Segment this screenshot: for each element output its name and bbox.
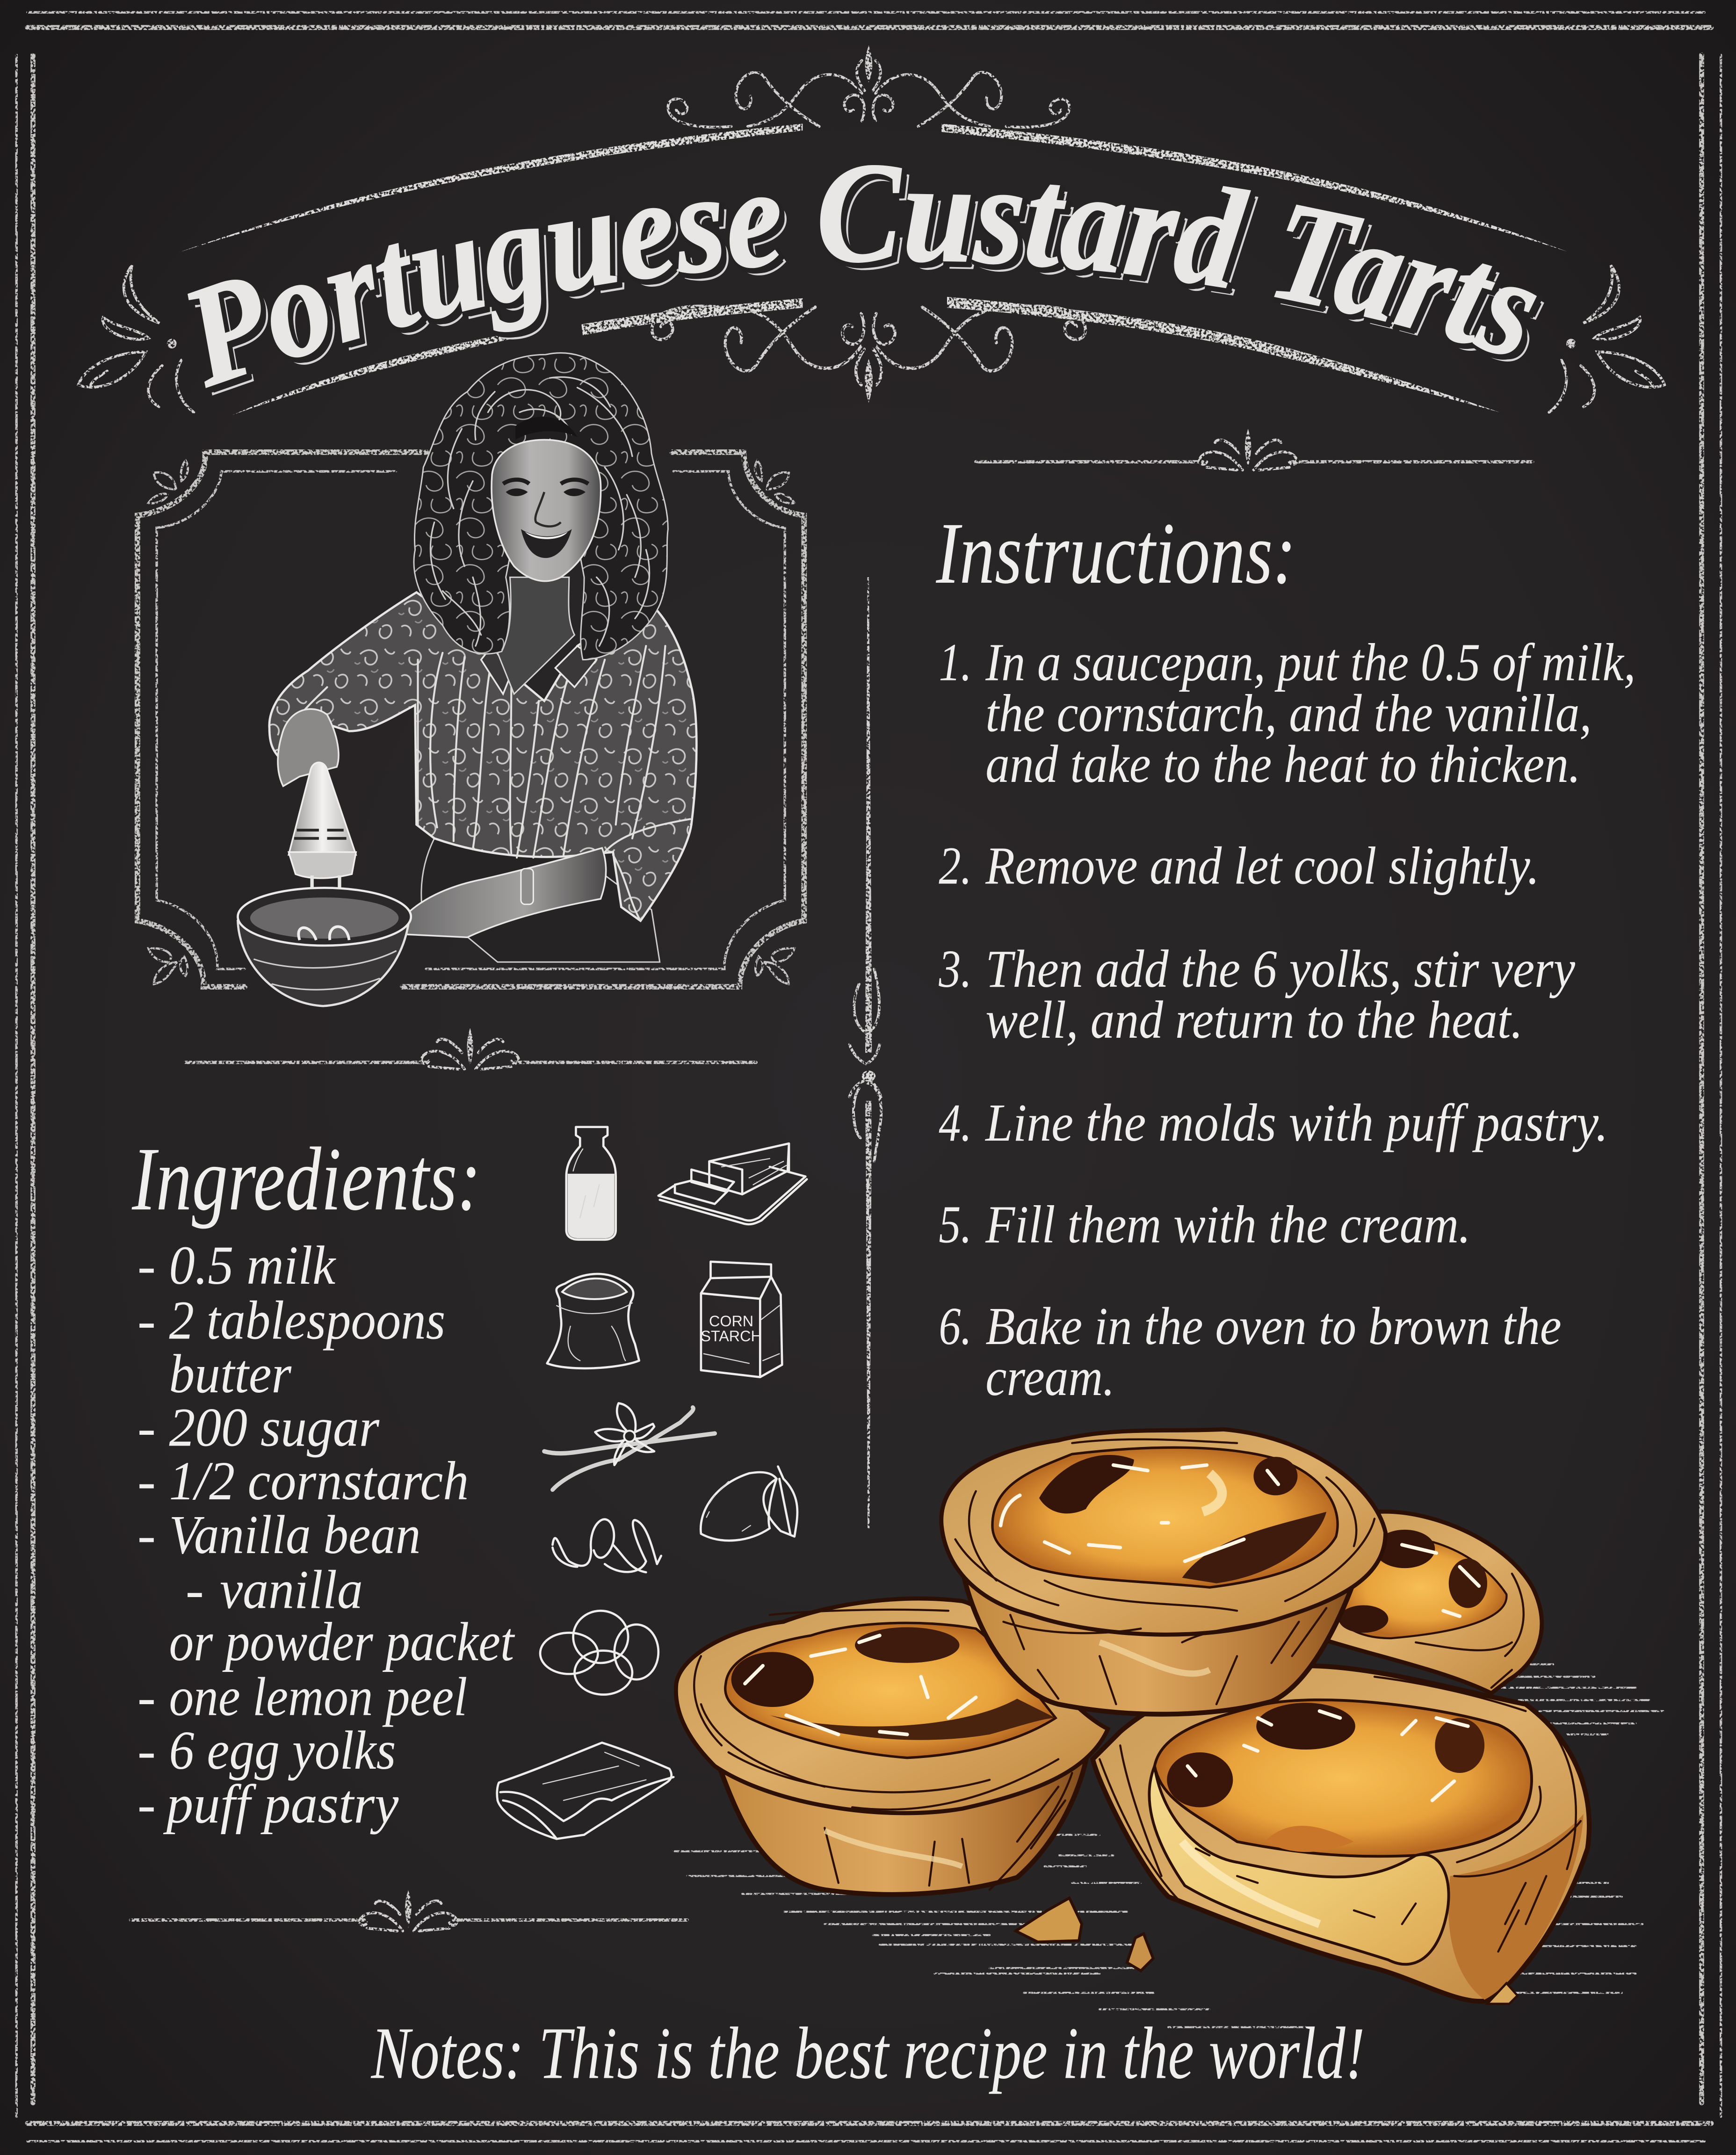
ingredients list: 1/2 cornstarch — [169, 1451, 469, 1511]
icon: lemon peel curl — [552, 1519, 661, 1572]
step 3: Then add the 6 yolks, stir very — [985, 939, 1575, 998]
icon: lemon with leaf — [701, 1467, 797, 1540]
title: Portuguese Custard Tarts: Portuguese Custard Tarts — [163, 133, 1558, 418]
eyes and brows — [503, 480, 588, 484]
step 1: In a saucepan, put the 0.5 of milk, — [985, 633, 1635, 692]
ingredients list: - — [137, 1451, 156, 1511]
ingredients list: - — [137, 1397, 156, 1458]
ingredients list: - — [137, 1667, 156, 1728]
ingredients list: 6 egg yolks — [169, 1720, 396, 1781]
mixing bowl — [238, 888, 411, 1006]
icon: corn starch box — [701, 1262, 782, 1377]
step 6: cream. — [985, 1347, 1115, 1407]
ingredients list: 200 sugar — [169, 1397, 380, 1458]
title: Portuguese Custard Tarts: Portuguese Custard Tarts — [170, 140, 1565, 424]
ingredients list: - — [137, 1290, 156, 1351]
step 2: 2. — [939, 836, 972, 896]
tart: top — [941, 1429, 1386, 1714]
step 2: Remove and let cool slightly. — [985, 836, 1540, 896]
icon: sugar sack — [547, 1274, 639, 1368]
ingredients list: vanilla — [220, 1559, 363, 1620]
ingredients list: Vanilla bean — [169, 1504, 420, 1565]
top flourish — [668, 45, 1070, 127]
hair — [414, 353, 668, 660]
tart: front with bite — [1093, 1666, 1589, 2001]
custard tarts illustration — [676, 1429, 1589, 2004]
ingredients list: puff pastry — [163, 1774, 399, 1835]
ingredients list: - — [137, 1235, 156, 1296]
tart table chalk hatching — [673, 1664, 1663, 2027]
divider bottom left — [130, 1890, 687, 1931]
bottom flourish — [652, 306, 1085, 403]
step 1: and take to the heat to thicken. — [985, 734, 1581, 794]
ingredients list: or powder packet — [169, 1612, 515, 1672]
skirt — [421, 839, 660, 962]
blouse — [269, 593, 696, 921]
icon: corn starch box: CORN — [709, 1313, 753, 1330]
ingredients list: - — [137, 1774, 156, 1835]
step 5: Fill them with the cream. — [985, 1195, 1471, 1254]
step 3: 3. — [939, 939, 972, 998]
tart: left — [676, 1598, 1108, 1895]
left arm hand — [278, 709, 339, 786]
icon: milk bottle — [566, 1127, 616, 1240]
ingredients heading: Ingredients: — [131, 1128, 481, 1229]
frame corner leaves — [148, 460, 795, 984]
portrait frame — [137, 452, 804, 987]
ingredients list: 2 tablespoons — [169, 1290, 445, 1351]
vertical centre divider — [849, 577, 881, 1528]
step 6 — [939, 1296, 1562, 1407]
icon: puff pastry sheets — [497, 1743, 673, 1839]
ingredients list: butter — [169, 1344, 292, 1404]
right side flourish — [1549, 265, 1664, 412]
step 1: 1. — [939, 633, 972, 692]
step 6: Bake in the oven to brown the — [985, 1296, 1562, 1356]
ingredients list — [137, 1235, 515, 1835]
face — [492, 440, 601, 581]
divider top right — [976, 429, 1533, 470]
step 4: Line the molds with puff pastry. — [984, 1093, 1608, 1152]
ingredients list: - — [137, 1720, 156, 1781]
instructions list — [939, 633, 1635, 1407]
title arcs and ornaments — [79, 45, 1664, 415]
icon: eggs — [540, 1611, 658, 1695]
step 6: 6. — [939, 1296, 972, 1356]
crumb — [1016, 1898, 1082, 1942]
step 4: 4. — [939, 1093, 972, 1152]
tart: back right — [1319, 1511, 1542, 1693]
ingredients list: 0.5 milk — [169, 1235, 336, 1296]
step 1 — [939, 633, 1635, 794]
step 5: 5. — [939, 1195, 972, 1254]
notes line: Notes: This is the best recipe in the world! — [370, 2012, 1365, 2094]
nose — [535, 492, 561, 527]
ingredients list: - — [137, 1504, 156, 1565]
icon: butter on dish — [658, 1143, 807, 1224]
left side flourish — [79, 265, 194, 412]
upper title arc — [177, 123, 1567, 253]
neck — [498, 577, 575, 694]
step 1: the cornstarch, and the vanilla, — [985, 683, 1591, 743]
step 3: well, and return to the heat. — [985, 990, 1523, 1049]
ingredients list: - — [186, 1559, 204, 1620]
crumb — [1127, 1934, 1153, 1971]
mixer — [289, 762, 356, 924]
ingredients list: one lemon peel — [169, 1667, 467, 1728]
instructions heading: Instructions: — [936, 504, 1296, 602]
smile — [521, 529, 572, 558]
portrait: woman with mixer — [238, 353, 696, 1006]
step 3 — [939, 939, 1575, 1049]
icon: corn starch box: STARCH — [701, 1328, 762, 1345]
lower title arc — [232, 297, 1499, 415]
divider under portrait — [186, 1028, 756, 1069]
wrist watch — [521, 868, 533, 904]
title: Portuguese Custard Tarts: Portuguese Custard Tarts — [166, 136, 1561, 420]
crumb — [1487, 1983, 1518, 2004]
icon: vanilla bean and flower — [544, 1403, 715, 1490]
right forearm and hand — [401, 848, 606, 937]
